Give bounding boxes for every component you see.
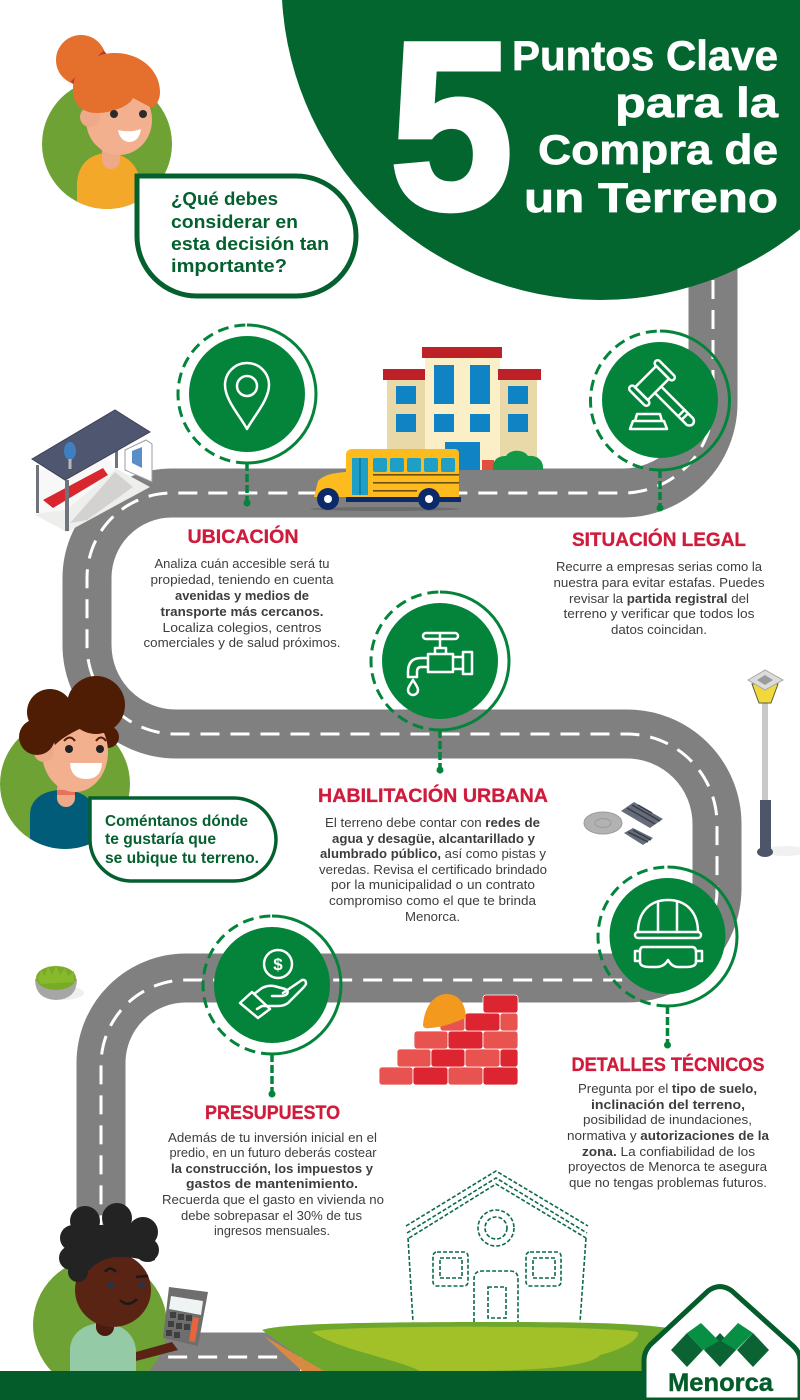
illustration: grass field	[262, 1322, 680, 1371]
speech bubble: comment prompt: te gustaría que	[105, 831, 216, 848]
icon: hand holding coin: $	[273, 955, 283, 974]
icon: location pin	[178, 325, 316, 506]
heading and text: habilitación urbana: agua y desagüe, alcantarillado y	[332, 831, 536, 846]
heading and text: habilitación urbana: HABILITACIÓN URBANA	[318, 785, 548, 807]
big number 5: 5	[390, 0, 513, 259]
heading and text: presupuesto: la construcción, los impuestos y	[171, 1161, 374, 1176]
character: man with curly hair	[0, 676, 130, 849]
icon: gavel	[590, 331, 730, 512]
heading and text: ubicación: Analiza cuán accesible será tu	[154, 556, 330, 571]
heading and text: situación legal: nuestra para evitar estafas. Puedes	[554, 575, 765, 590]
illustration: street lamp	[748, 670, 800, 857]
heading and text: situación legal: terreno y verificar que todos los	[564, 606, 755, 621]
illustration: bricks and hard hat	[379, 994, 518, 1085]
heading and text: presupuesto: PRESUPUESTO	[205, 1103, 340, 1124]
heading and text: ubicación: Localiza colegios, centros	[162, 620, 322, 635]
icon: hand holding coin	[203, 916, 341, 1098]
heading and text: habilitación urbana: El terreno debe contar con redes de	[325, 815, 540, 830]
heading and text: ubicación: transporte más cercanos.	[160, 604, 324, 619]
speech bubble: question: importante?	[171, 256, 287, 276]
heading and text: habilitación urbana: por la municipalidad o un contrato	[331, 877, 535, 892]
heading and text: ubicación: UBICACIÓN	[188, 526, 298, 548]
icon: hard hat and goggles	[598, 867, 737, 1048]
title: Compra de	[538, 126, 778, 173]
illustration: school bus	[310, 449, 461, 511]
speech bubble: question	[137, 176, 356, 296]
illustration: school building	[383, 347, 543, 470]
heading and text: detalles técnicos: zona. La confiabilidad de los	[582, 1144, 756, 1159]
heading and text: detalles técnicos: inclinación del terreno,	[591, 1097, 745, 1112]
character: man with calculator	[33, 1203, 208, 1392]
road	[87, 250, 717, 1357]
heading and text: habilitación urbana: Menorca.	[405, 909, 460, 924]
speech bubble: question: esta decisión tan	[171, 234, 329, 254]
heading and text: presupuesto: Además de tu inversión inicial en el	[168, 1130, 377, 1145]
icon: water faucet	[371, 592, 509, 774]
logo: Menorca	[644, 1286, 800, 1400]
title: Puntos Clave	[512, 32, 778, 79]
heading and text: presupuesto: Recuerda que el gasto en vivienda no	[162, 1192, 384, 1207]
heading and text: detalles técnicos: que no tengas problemas futuros.	[569, 1175, 767, 1190]
heading and text: presupuesto	[162, 1103, 384, 1238]
heading and text: habilitación urbana: compromiso como el que te brinda	[329, 893, 537, 908]
heading and text: detalles técnicos	[567, 1054, 770, 1190]
title: para la	[615, 79, 779, 126]
illustration: manhole and grates	[584, 802, 663, 845]
heading and text: detalles técnicos: proyectos de Menorca te asegura	[568, 1159, 768, 1174]
heading and text: ubicación	[144, 526, 340, 650]
heading and text: habilitación urbana: alumbrado público, así como pistas y	[320, 846, 546, 861]
speech bubble: comment prompt: Coméntanos dónde	[105, 813, 248, 830]
title	[390, 0, 779, 259]
heading and text: ubicación: avenidas y medios de	[175, 588, 309, 603]
heading and text: situación legal: Recurre a empresas serias como la	[556, 559, 763, 574]
heading and text: situación legal	[554, 529, 765, 637]
heading and text: presupuesto: debe sobrepasar el 30% de tus	[181, 1208, 362, 1223]
bottom band	[0, 1371, 800, 1400]
character: woman	[42, 35, 172, 209]
heading and text: detalles técnicos: posibilidad de inundaciones,	[583, 1112, 752, 1127]
heading and text: ubicación: comerciales y de salud próximos.	[144, 635, 340, 650]
heading and text: ubicación: propiedad, teniendo en cuenta	[150, 572, 334, 587]
speech bubble: question: considerar en	[171, 212, 298, 232]
heading and text: situación legal: revisar la partida registral del	[569, 591, 749, 606]
heading and text: detalles técnicos: normativa y autorizaciones de la	[567, 1128, 770, 1143]
heading and text: presupuesto: ingresos mensuales.	[214, 1223, 330, 1238]
speech bubble: question: ¿Qué debes	[171, 189, 278, 209]
title: un Terreno	[524, 174, 778, 221]
heading and text: detalles técnicos: Pregunta por el tipo de suelo,	[578, 1081, 757, 1096]
heading and text: detalles técnicos: DETALLES TÉCNICOS	[572, 1054, 764, 1076]
logo: Menorca: Menorca	[668, 1369, 774, 1397]
heading and text: presupuesto: gastos de mantenimiento.	[186, 1176, 358, 1191]
heading and text: situación legal: datos coincidan.	[611, 622, 707, 637]
illustration: potted plant	[35, 965, 84, 1000]
calculator	[163, 1287, 208, 1346]
speech bubble: comment prompt	[90, 798, 276, 881]
header circle	[282, 0, 800, 300]
speech bubble: comment prompt: se ubique tu terreno.	[105, 850, 259, 867]
heading and text: habilitación urbana	[318, 785, 548, 924]
illustration: dashed outline house	[406, 1171, 588, 1322]
illustration: bus stop	[32, 410, 152, 532]
heading and text: habilitación urbana: veredas. Revisa el certificado brindado	[319, 862, 547, 877]
heading and text: presupuesto: predio, en un futuro deberás costear	[170, 1145, 377, 1160]
heading and text: situación legal: SITUACIÓN LEGAL	[572, 529, 746, 551]
